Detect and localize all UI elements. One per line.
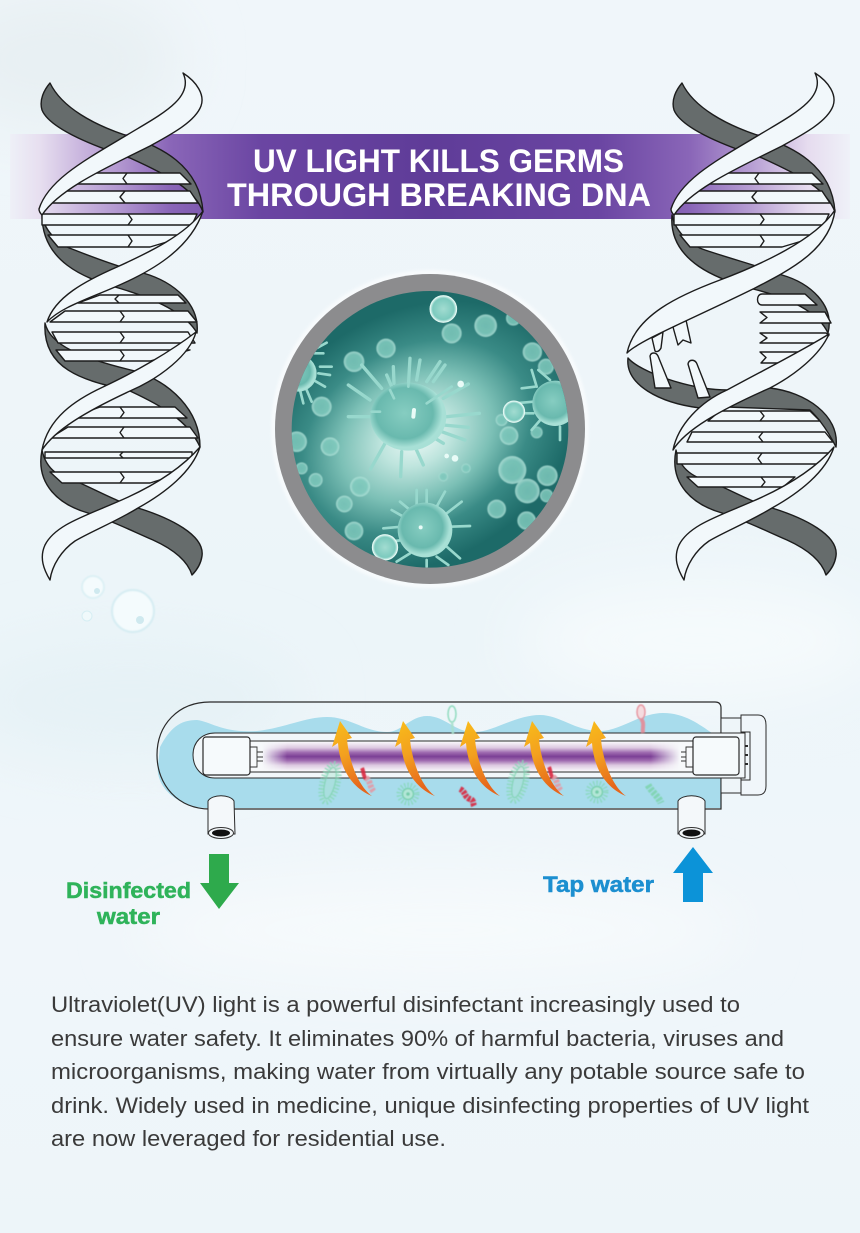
- circular virus microscope image: [271, 270, 589, 588]
- title text: THROUGH BREAKING DNA: [227, 177, 651, 213]
- disinfected water label: [66, 878, 191, 929]
- end cap: [721, 715, 766, 795]
- outer tube outline: [157, 702, 721, 809]
- inlet port: [678, 796, 705, 838]
- broken left base stubs: [650, 320, 710, 398]
- left virus: [297, 341, 333, 405]
- description paragraph: drink. Widely used in medicine, unique disinfecting properties of UV light: [51, 1093, 810, 1118]
- quartz sleeve: [193, 733, 745, 778]
- broken right base stubs: [758, 294, 831, 363]
- blue inflow arrow: [673, 847, 713, 902]
- title text: [227, 143, 651, 213]
- title banner: [10, 134, 850, 219]
- disinfected water label: water: [96, 904, 160, 929]
- right virus: [518, 368, 568, 442]
- description paragraph: microorganisms, making water from virtually any potable source safe to: [51, 1059, 805, 1084]
- disinfected water label: Disinfected: [66, 878, 191, 903]
- water fill: [158, 713, 721, 808]
- title text: UV LIGHT KILLS GERMS: [253, 143, 624, 179]
- description paragraph: Ultraviolet(UV) light is a powerful disinfectant increasingly used to: [51, 992, 740, 1017]
- description paragraph: are now leveraged for residential use.: [51, 1126, 446, 1151]
- germs: [317, 705, 661, 806]
- right DNA helix with broken middle section: [627, 73, 836, 580]
- main virus: [348, 358, 479, 477]
- floating bubbles: [286, 311, 558, 540]
- green outflow arrow: [200, 854, 239, 909]
- UV lamp: [203, 737, 739, 775]
- bright foreground bubbles: [372, 296, 525, 560]
- lower virus: [383, 490, 470, 567]
- UV water sterilizer diagram: [157, 702, 766, 838]
- left intact DNA helix: [39, 73, 203, 580]
- orange UV rays: [332, 721, 626, 796]
- outlet port: [208, 796, 235, 838]
- decorative water bubbles: [82, 576, 154, 632]
- description paragraph: [51, 992, 810, 1151]
- tap water label: Tap water: [543, 872, 654, 897]
- description paragraph: ensure water safety. It eliminates 90% of harmful bacteria, viruses and: [51, 1026, 784, 1051]
